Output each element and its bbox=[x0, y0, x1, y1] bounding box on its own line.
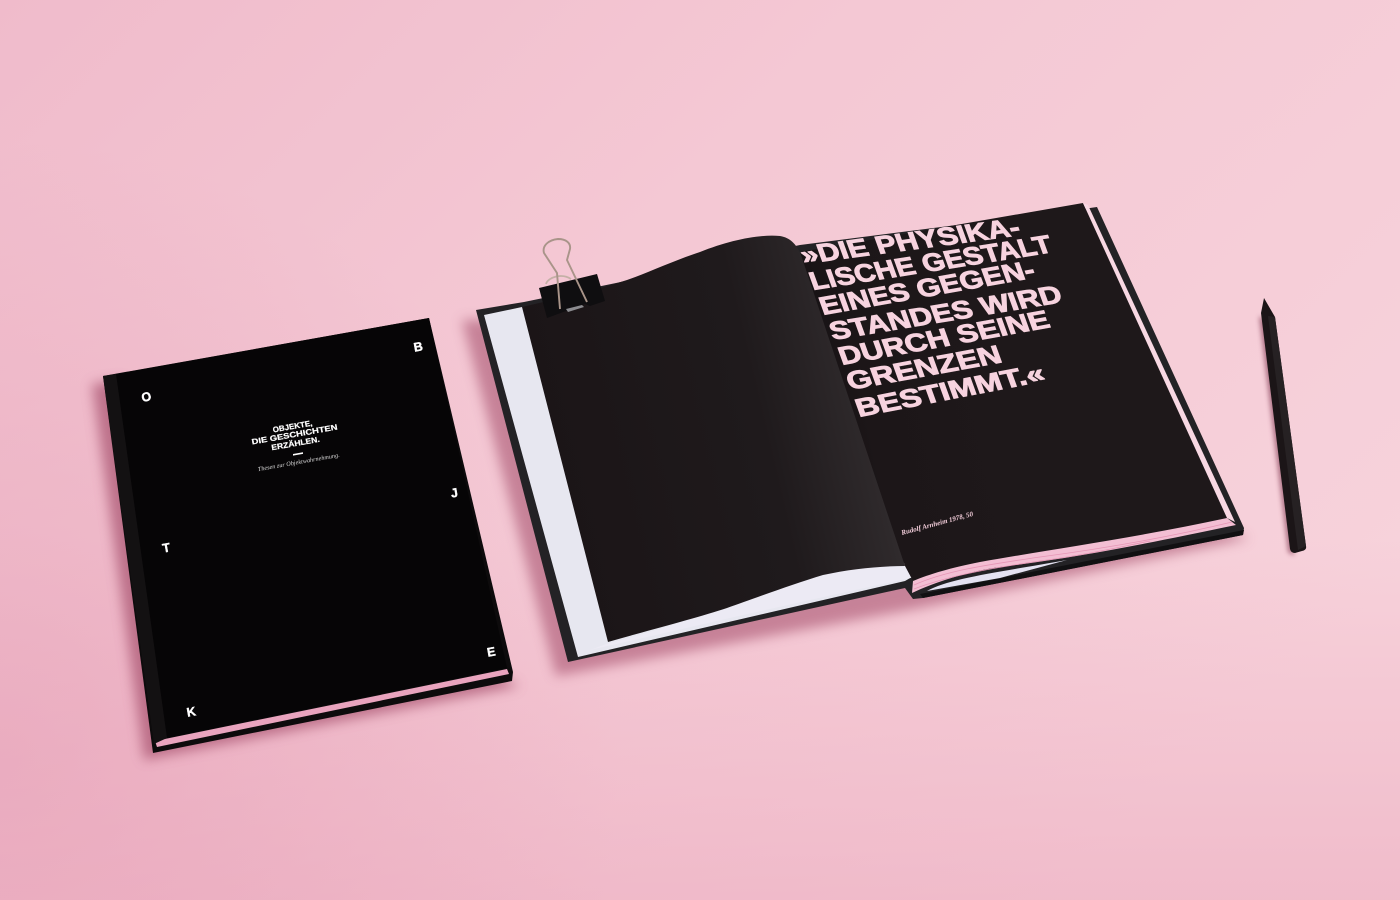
spine hinge bbox=[103, 374, 167, 744]
cover letters: J bbox=[450, 486, 459, 501]
pink page block bottom bbox=[912, 518, 1236, 593]
open book cover board bbox=[476, 207, 1244, 662]
board lower dark edge bbox=[920, 530, 1244, 598]
quote text bbox=[796, 212, 1066, 423]
white inner curled pages bbox=[590, 562, 919, 650]
cover dash bbox=[293, 452, 303, 456]
book board and spine bbox=[103, 318, 513, 753]
clip wire handle bbox=[544, 239, 587, 309]
white sliver below pink pages bbox=[927, 560, 1067, 591]
cover subtitle: Thesen zur Objektwahrnehmung. bbox=[257, 452, 340, 473]
pencil bbox=[1259, 298, 1306, 556]
cover letters: T bbox=[161, 540, 172, 556]
cover title bbox=[251, 419, 339, 452]
pink page edge bbox=[155, 669, 509, 747]
white left page stack bbox=[484, 307, 917, 657]
cover letters: E bbox=[486, 644, 497, 660]
binder clip bbox=[539, 239, 605, 318]
curled black page bbox=[522, 236, 905, 642]
closed book bbox=[92, 318, 520, 760]
clip ring bbox=[546, 276, 571, 284]
right page bbox=[800, 203, 1227, 581]
quote text: DURCH SEINE bbox=[834, 304, 1054, 371]
cover letters: B bbox=[413, 339, 424, 355]
cover title: ERZÄHLEN. bbox=[271, 435, 320, 452]
clip highlight bbox=[566, 305, 584, 312]
pencil facet bbox=[1268, 316, 1306, 550]
open book bbox=[462, 203, 1250, 676]
quote attribution: Rudolf Arnheim 1978, 50 bbox=[899, 510, 974, 537]
front cover bbox=[116, 318, 507, 738]
quote text: LISCHE GESTALT bbox=[805, 229, 1056, 296]
pink page layer lines bbox=[914, 522, 1232, 589]
cover letters bbox=[140, 339, 497, 720]
cover title: DIE GESCHICHTEN bbox=[251, 422, 339, 447]
clip body bbox=[539, 274, 605, 318]
cover letters: K bbox=[186, 704, 197, 720]
right page edge strip bbox=[1083, 203, 1235, 522]
quote text: »DIE PHYSIKA- bbox=[796, 212, 1024, 270]
quote text: STANDES WIRD bbox=[825, 279, 1066, 346]
cover title: OBJEKTE, bbox=[272, 419, 313, 434]
quote text: GRENZEN bbox=[842, 339, 1006, 396]
quote text: EINES GEGEN- bbox=[815, 255, 1039, 321]
quote text: BESTIMMT.« bbox=[851, 358, 1049, 423]
cover letters: O bbox=[140, 389, 153, 405]
